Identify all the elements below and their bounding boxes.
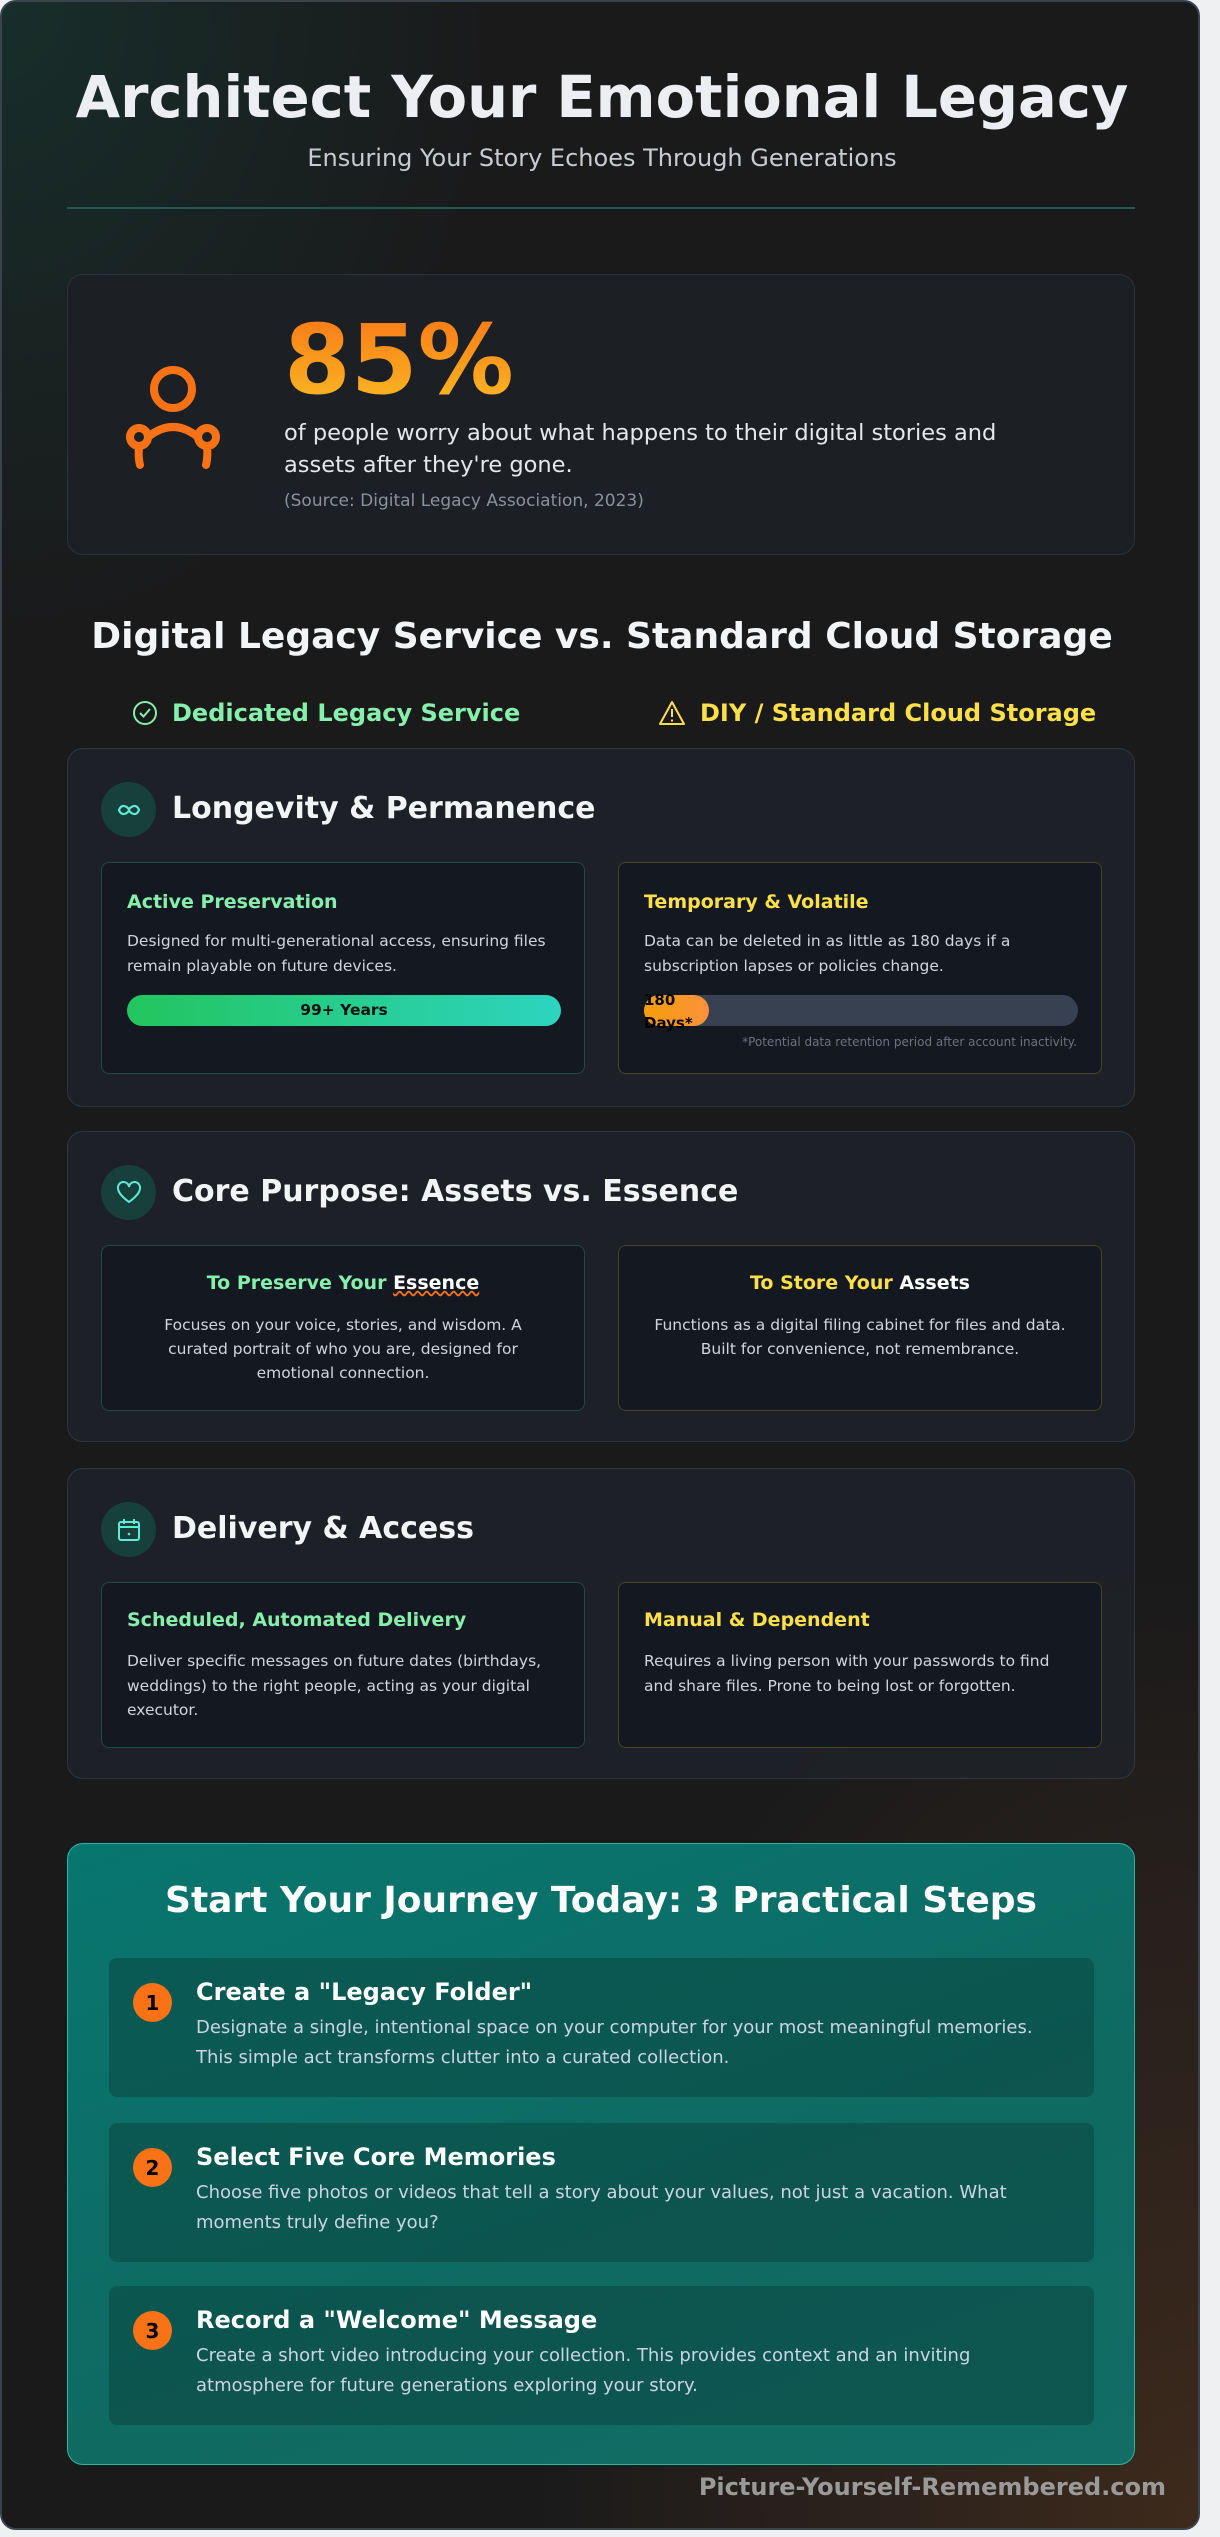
subcard: active preservation [101,862,585,1074]
panel: stat [67,274,1135,555]
subcard: essence: Focuses on your voice, stories, and wisdom. A curated portrait of who you are, designed for emotional connection. [164,1316,522,1382]
bar: 180 days: 180 Days* [644,991,693,1032]
subcard: temporary: Data can be deleted in as little as 180 days if a subscription lapses or policies change. [644,932,1010,974]
bar: 99+ years [127,995,561,1026]
icon: calendar [101,1502,156,1557]
stat number: 85% [284,304,514,416]
subcard: scheduled: Scheduled, Automated Delivery [127,1609,466,1631]
subcard: essence: To Preserve Your Essence [207,1272,479,1294]
bar: 180 days [644,995,1078,1026]
subcard: manual [618,1582,1102,1748]
step 1: Create a "Legacy Folder" [196,1978,532,2006]
subcard: temporary [618,862,1102,1074]
subcard: manual: Requires a living person with your passwords to find and share files. Prone to being lost or forgotten. [644,1652,1049,1694]
step 3: Create a short video introducing your collection. This provides context and an inviting atmosphere for future generations exploring your story. [196,2345,970,2396]
subcard: assets [618,1245,1102,1411]
icon: person [126,366,220,469]
heading: Delivery & Access [172,1511,474,1546]
panel: core purpose [67,1131,1135,1442]
steps heading: Start Your Journey Today: 3 Practical Steps [165,1880,1037,1921]
subcard: active preservation: Active Preservation [127,891,338,913]
panel: longevity [67,748,1135,1107]
step 1 [109,1958,1094,2097]
bar: 99+ years: 99+ Years [300,1001,388,1019]
panel: steps [67,1843,1135,2465]
panel: delivery [67,1468,1135,1779]
subcard: scheduled: Deliver specific messages on future dates (birthdays, weddings) to the right people, acting as your digital executor. [127,1652,541,1719]
step 3 [109,2286,1094,2425]
step 2: Choose five photos or videos that tell a story about your values, not just a vacation. What moments truly define you? [196,2182,1007,2233]
step 1: Designate a single, intentional space on your computer for your most meaningful memories. This simple act transforms clutter into a curated collection. [196,2017,1033,2068]
subcard: manual: Manual & Dependent [644,1609,870,1631]
subcard: scheduled [101,1582,585,1748]
subcard: temporary: Temporary & Volatile [644,891,869,913]
title: Architect Your Emotional Legacy [76,64,1128,131]
heading: Core Purpose: Assets vs. Essence [172,1174,738,1209]
footnote: *Potential data retention period after account inactivity. [742,1035,1077,1049]
step 2: Select Five Core Memories [196,2143,556,2171]
subcard: essence [101,1245,585,1411]
subcard: assets: To Store Your Assets [750,1272,970,1294]
source: (Source: Digital Legacy Association, 2023) [284,491,644,511]
footer: Picture-Yourself-Remembered.com [699,2473,1166,2501]
icon: heart [101,1165,156,1220]
subcard: active preservation: Designed for multi-generational access, ensuring files remain playable on future devices. [127,932,546,974]
step 2: 2 [146,2156,159,2180]
stat text: of people worry about what happens to their digital stories and assets after they're gone. [284,420,996,478]
icon: infinity [101,782,156,837]
step 3: Record a "Welcome" Message [196,2306,597,2334]
legend: diy: DIY / Standard Cloud Storage [700,699,1096,727]
subcard: assets: Functions as a digital filing cabinet for files and data. Built for convenience, not remembrance. [654,1316,1066,1358]
subtitle: Ensuring Your Story Echoes Through Generations [307,144,897,172]
heading: Longevity & Permanence [172,791,596,826]
step 1: 1 [146,1990,159,2014]
section heading: Digital Legacy Service vs. Standard Cloud Storage [91,616,1113,657]
legend: dedicated: Dedicated Legacy Service [172,699,520,727]
step 3: 3 [146,2318,159,2342]
step 2 [109,2123,1094,2262]
